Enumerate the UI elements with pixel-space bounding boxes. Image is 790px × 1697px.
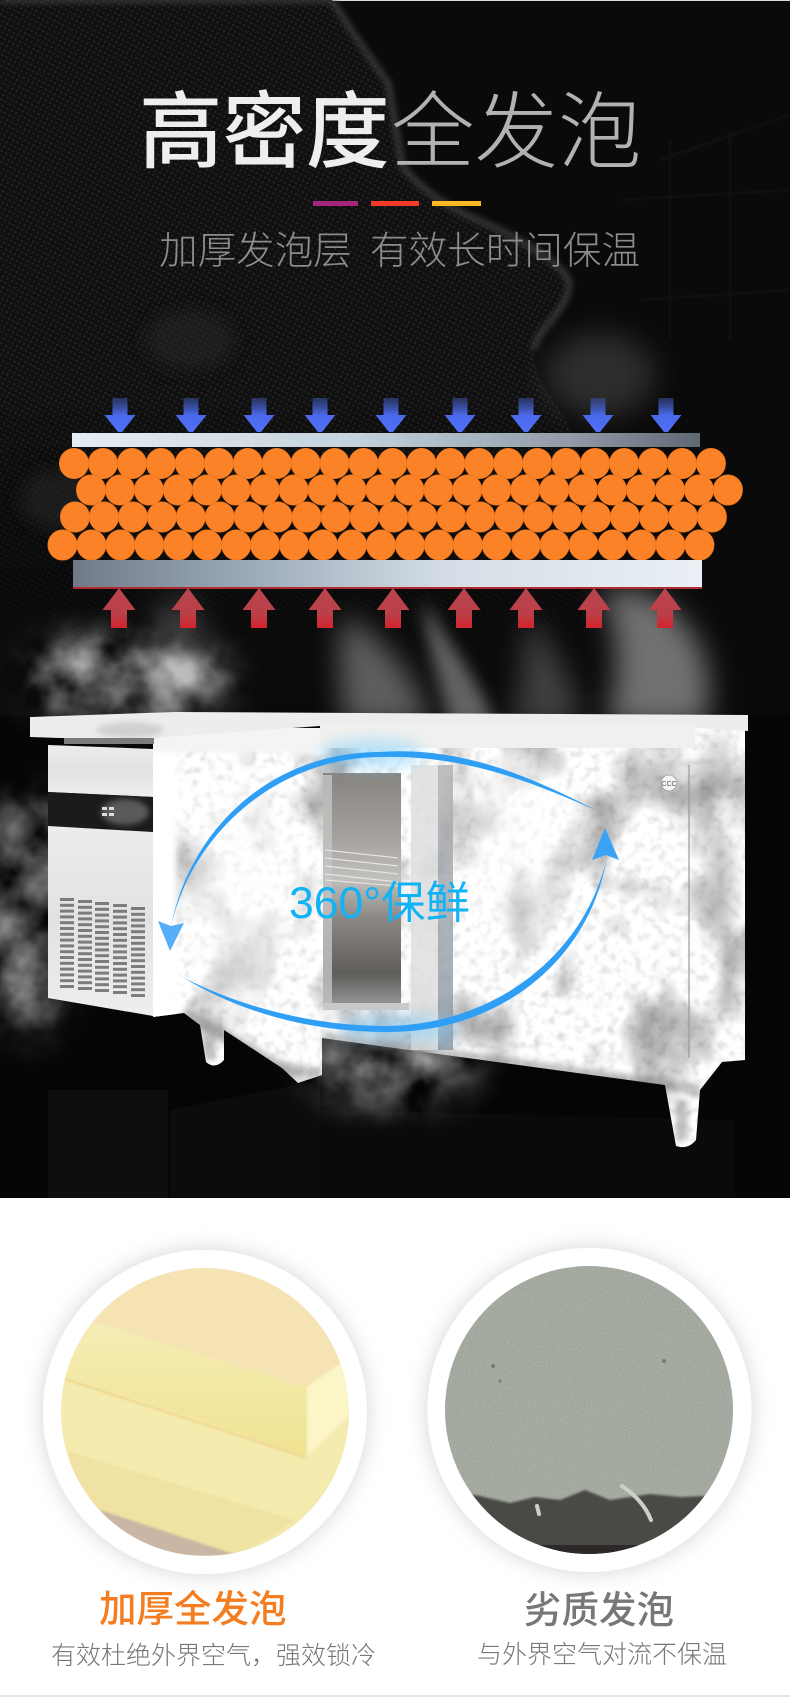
white comparison panel xyxy=(0,1198,790,1697)
smoke streaks xyxy=(150,590,709,725)
poor foam circle xyxy=(428,1248,752,1572)
dark background panel xyxy=(0,0,790,1198)
colour accent bars xyxy=(313,201,481,206)
CCC badge xyxy=(661,775,677,791)
frosted fridge xyxy=(30,712,750,1150)
glass door window xyxy=(323,765,453,1050)
bottom plate xyxy=(73,560,702,589)
lower arrow xyxy=(184,857,607,1032)
heat arrows xyxy=(102,588,682,628)
upper arrow xyxy=(171,751,600,926)
fridge body xyxy=(145,722,750,1150)
yellow foam image xyxy=(61,1268,349,1556)
title xyxy=(139,85,642,179)
poor foam heading: 劣质发泡 xyxy=(524,1589,674,1631)
circulation arrows xyxy=(158,740,619,1040)
countertop xyxy=(30,712,748,748)
insulation diagram xyxy=(48,398,743,628)
good foam heading: 加厚全发泡 xyxy=(99,1588,286,1630)
smoke cloud: under fridge xyxy=(300,1020,480,1104)
smoke cloud: left of fridge xyxy=(0,790,84,1040)
left arrow head xyxy=(158,921,184,951)
foam cell layers xyxy=(48,448,743,560)
right arrow head xyxy=(592,828,619,860)
top plate xyxy=(72,433,700,447)
CCC badge: CCC xyxy=(661,781,677,788)
right door seam xyxy=(688,765,690,1058)
good foam circle xyxy=(43,1250,367,1574)
good foam description: 有效杜绝外界空气，强效锁冷 xyxy=(51,1642,376,1670)
title: 全发泡 xyxy=(391,85,642,179)
360 label: 360°保鲜 xyxy=(289,879,470,928)
compressor module xyxy=(48,745,153,1016)
poor foam description: 与外界空气对流不保温 xyxy=(477,1641,727,1669)
vent grille xyxy=(60,898,145,997)
grey foam image xyxy=(445,1266,733,1556)
title: 高密度 xyxy=(139,85,390,179)
smoke cloud: upper left xyxy=(15,632,235,724)
cold air arrows xyxy=(104,398,682,432)
subtitle second part: 有效长时间保温 xyxy=(370,230,640,273)
subtitle: 加厚发泡层 xyxy=(159,230,352,273)
